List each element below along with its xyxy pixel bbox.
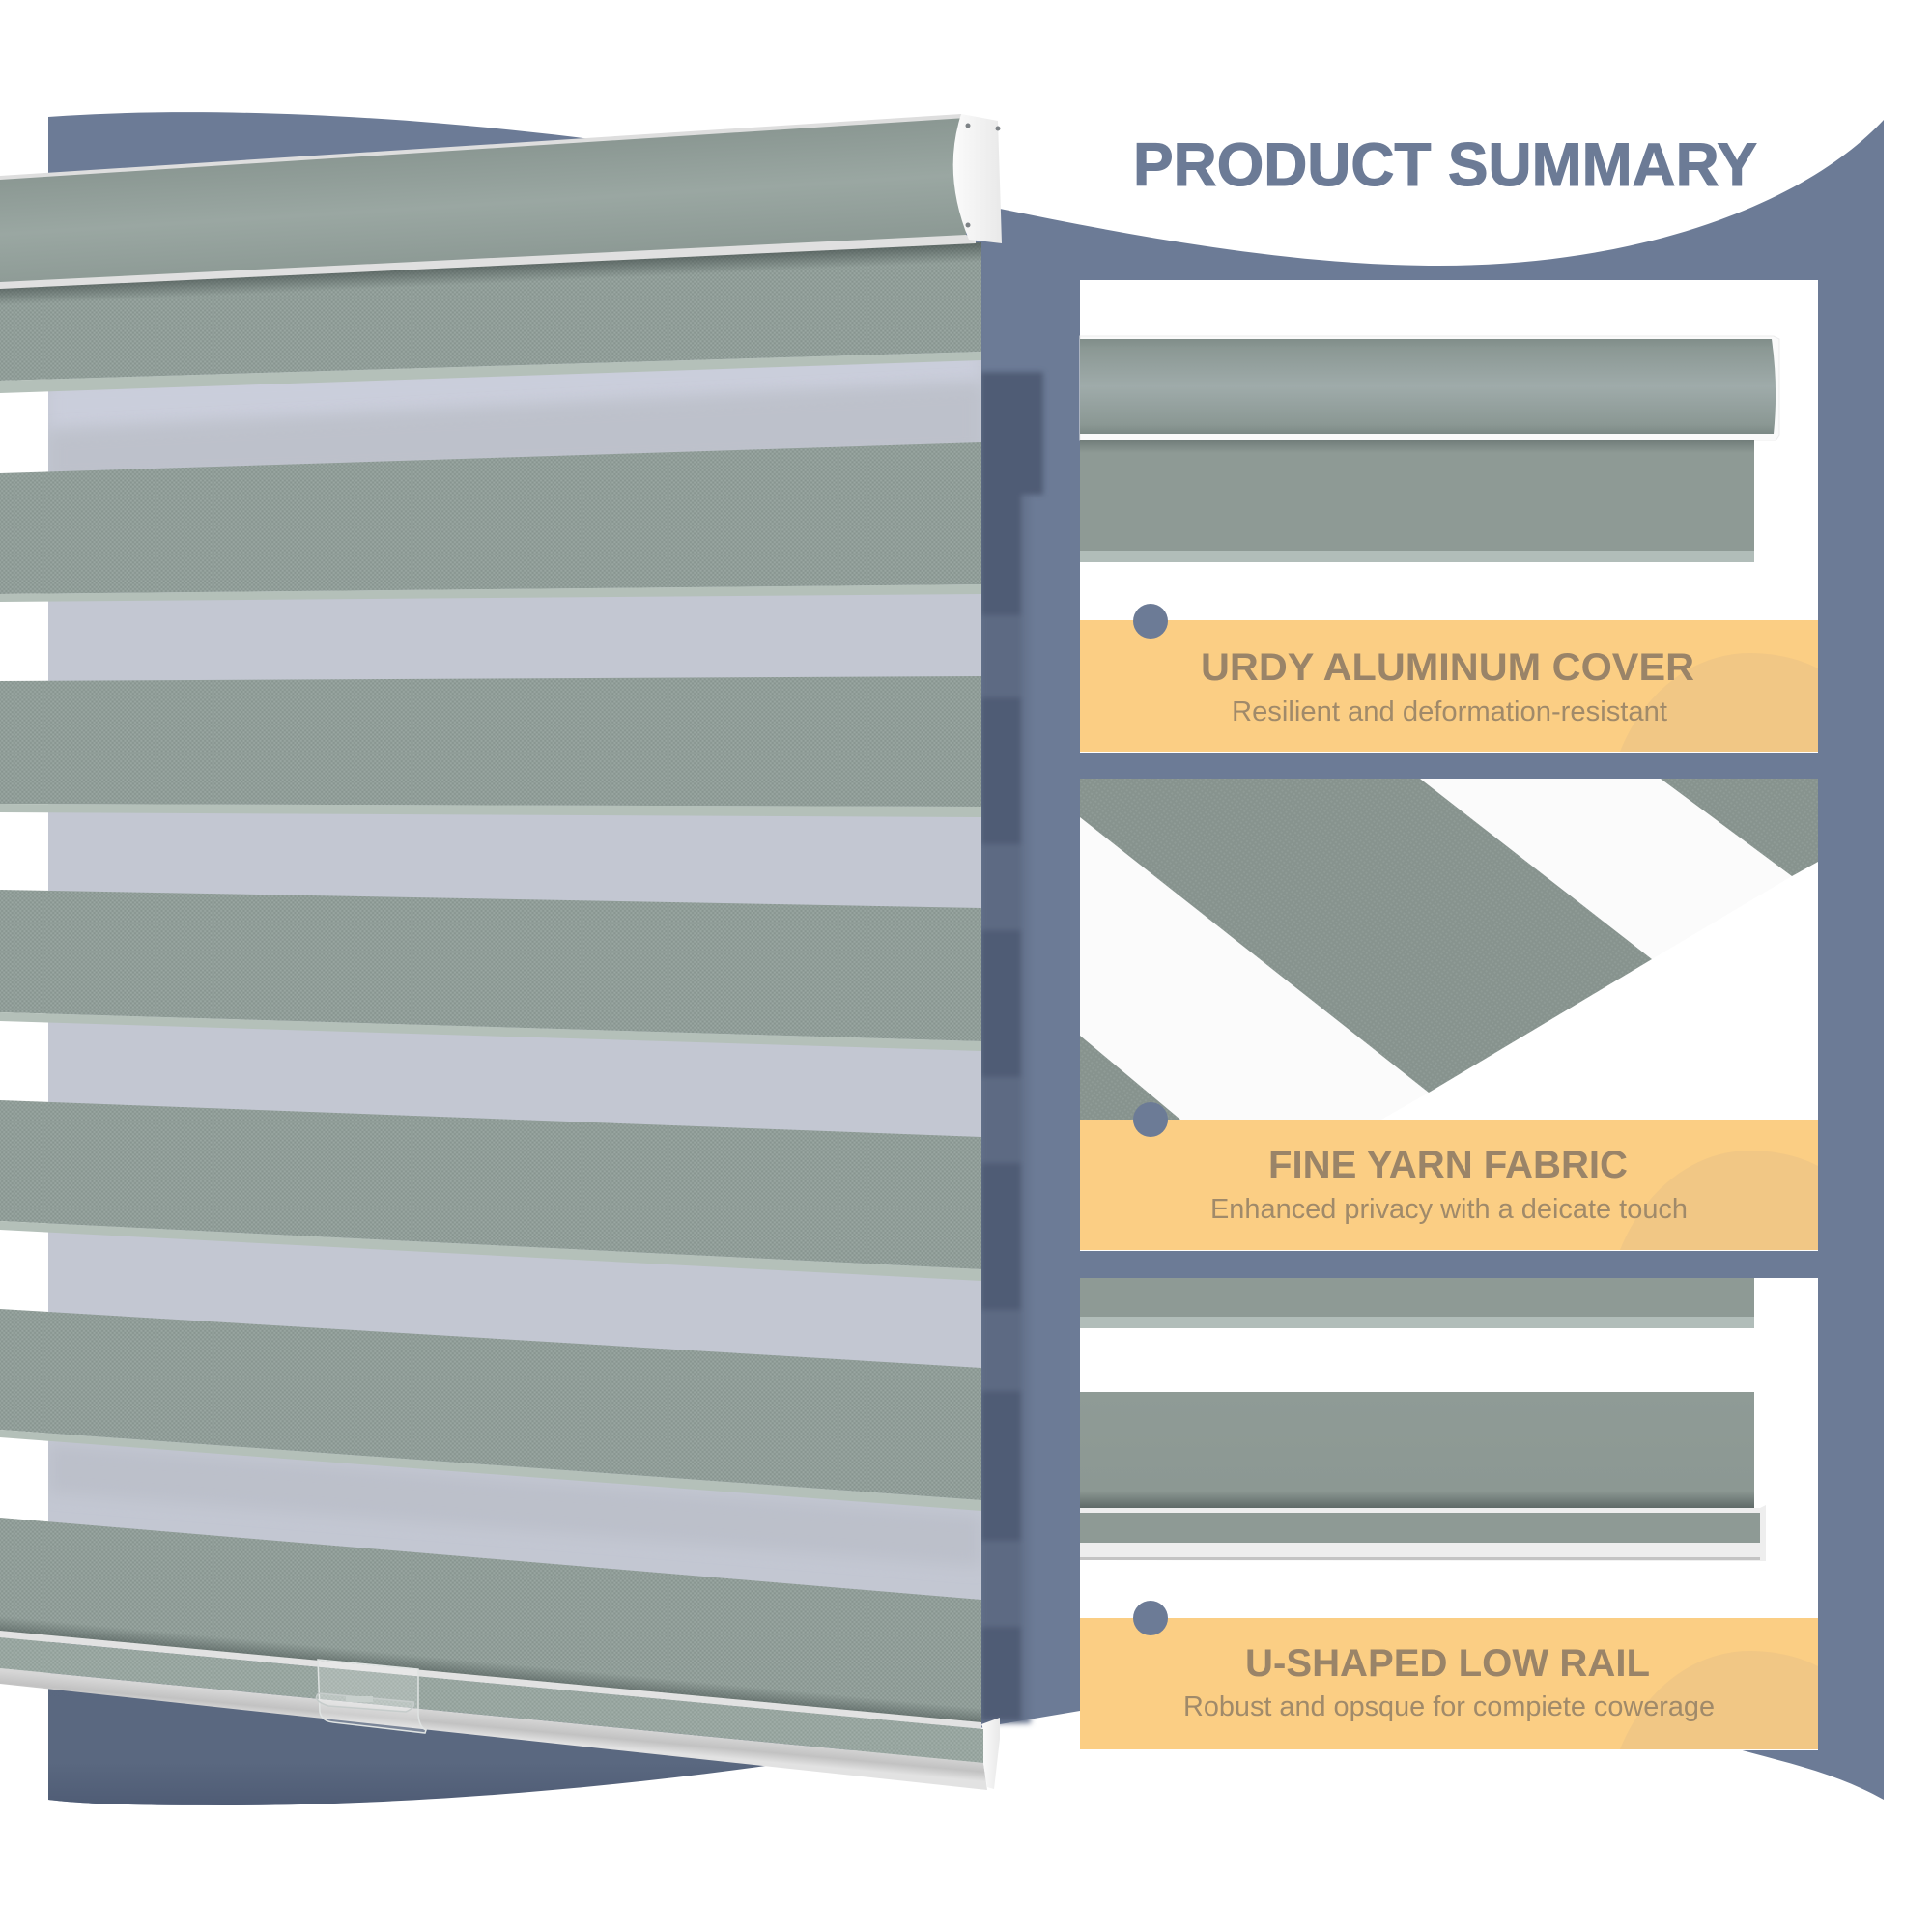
panel: fine yarn fabric [1080, 779, 1818, 1251]
fabric band 1 [0, 242, 981, 381]
marker dot [1133, 1102, 1168, 1137]
caption banner: Resilient and deformation-resistant [1232, 696, 1667, 727]
bottom rail [0, 1631, 1000, 1790]
fabric band 5 [0, 1100, 981, 1269]
caption banner: U-SHAPED LOW RAIL [1245, 1642, 1650, 1685]
fabric band 4 [0, 890, 981, 1041]
caption banner: Enhanced privacy with a deicate touch [1210, 1194, 1688, 1225]
fabric band 3 [0, 676, 981, 807]
caption banner: URDY ALUMINUM COVER [1201, 646, 1694, 689]
caption banner [1080, 1618, 1818, 1749]
marker dot [1133, 604, 1168, 639]
caption banner: FINE YARN FABRIC [1268, 1144, 1628, 1186]
marker dot [1133, 1601, 1168, 1635]
caption banner [1080, 1120, 1818, 1250]
darker shadow under bottom rail [48, 1633, 821, 1805]
panel: u-shaped low rail [1080, 1278, 1818, 1750]
fabric band 2 [0, 442, 981, 594]
fabric band 7 [0, 1518, 981, 1724]
fabric band 6 [0, 1309, 981, 1500]
sheer stripes [48, 348, 981, 1642]
photo: fabric closeup [1080, 779, 1818, 1120]
top cover [0, 114, 1002, 289]
transparent clip [317, 1660, 426, 1733]
panel: aluminum cover [1080, 280, 1818, 753]
window blind product [0, 114, 1002, 1790]
title: PRODUCT SUMMARY [1133, 131, 1757, 199]
caption banner: Robust and opsque for compiete cowerage [1183, 1691, 1715, 1722]
shadow of blind on the wall [980, 372, 1043, 1723]
photo: cover closeup [1080, 336, 1779, 562]
photo: rail closeup [1080, 1278, 1766, 1561]
caption banner [1080, 620, 1818, 752]
